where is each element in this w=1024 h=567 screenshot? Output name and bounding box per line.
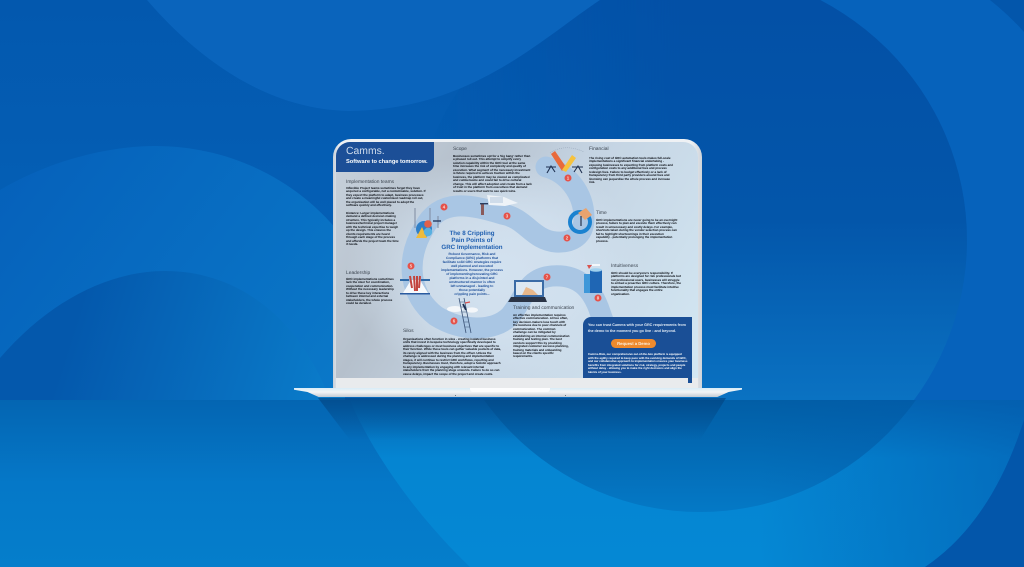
step number markers: 4 bbox=[443, 205, 446, 210]
heading: Leadership bbox=[346, 271, 370, 276]
intro text: those potentially bbox=[459, 288, 485, 292]
body text: The rising cost of GRC automation tools makes full-scale implementations a significant financial undertaking - exposing businesses to expecting from platform costs and configuration costs to any additional fees and process redesign fees. Failure to budget effectively or a lack of transparency from third party providers around fees and licensing can jeopardise the whole process and increase risk. bbox=[589, 156, 673, 184]
title: Pain Points of bbox=[451, 237, 493, 244]
title bbox=[441, 230, 503, 251]
journey path bbox=[412, 167, 616, 352]
body text: Businesses sometimes opt for a 'big bang' rather than a phased roll out. This attempt to simplify every solution capability within the GRC tool at the same time increases the risk of complexity and quality of execution. What segment of the necessary investment is future required to achieve traction within the business, the platform may be viewed as complicated and cumbersome and could fail to drive cultural change. This will affect adoption and create from a lack of trust in the platform from executives that demand results or users that want to see quick wins. bbox=[453, 154, 532, 193]
step number markers: 1 bbox=[567, 176, 570, 181]
intro text: Compliance (GRC) platforms that bbox=[446, 256, 498, 260]
section: financial bbox=[589, 146, 673, 184]
CTA headline: You can trust Camms with your GRC requirements from bbox=[588, 323, 686, 327]
logo: Camms. bbox=[346, 146, 385, 157]
body text: GRC implementations are never going to be an overnight process, failure to plan and execute them effectively can result in unnecessary and costly delays. For example, shortcuts taken during the vendor selection process can fail to highlight shortcomings in their execution capability - potentially prolonging the implementation process. bbox=[596, 218, 677, 243]
intro text: implementations. However, the process bbox=[441, 268, 503, 272]
icon: scope plans and figure bbox=[480, 195, 518, 215]
header: Camms branding bbox=[336, 142, 434, 172]
intro text: crippling pain points... bbox=[454, 292, 490, 296]
step number markers: 8 bbox=[597, 296, 600, 301]
CTA body text: Camms.Risk, our comprehensive out-of-the-box platform is equipped with the agility required to keep pace with the evolving demands of GRC, and our collaborative approach to implementation ensures your business benefits from integrated solutions for risk, strategy, projects and people without delay - allowing you to make the right decisions and align the talents of your business. bbox=[588, 352, 687, 374]
step number markers bbox=[408, 174, 602, 324]
title: GRC Implementation bbox=[441, 244, 503, 251]
intro text: facilitate solid GRC strategies require bbox=[443, 260, 501, 264]
section: implementation teams bbox=[346, 180, 426, 246]
intro text: of implementing/renovating GRC bbox=[446, 272, 498, 276]
paragraph two: Distance: Larger implementations demand a defined decision making structure. This typically includes a business/technical project manager with the technical expertise to weigh up the design. This ensures the clients requirements are heard through each stage of the process and affords the project team the time it needs. bbox=[346, 211, 399, 246]
icon: implementation team figures bbox=[415, 208, 441, 238]
icon: time circular clock bbox=[570, 208, 592, 232]
body text: An effective implementation requires effective communication. All too often, key decision-makers lose touch with the business due to poor channels of communication. The common challenge can be mitigated by establishing an internal communication training and testing plan. The best vendors support this by providing integrated customer success planning, training materials and onboarding based on the clients specific requirements. bbox=[513, 313, 570, 358]
section: leadership bbox=[346, 270, 394, 305]
intro text: left unmanaged - leading to bbox=[451, 284, 493, 288]
icon: financial arrows and figures bbox=[546, 148, 584, 173]
centre title and intro bbox=[441, 230, 503, 296]
paragraph one: Inflexible Project teams sometimes forget they have acquired a configurable, not a customisable, solution. If they expect the platform to adapt, business processes and create a meaningful customised roadmap roll out, the organisation will be well placed to adopt the software quickly and effectively. bbox=[346, 186, 426, 207]
step number markers: 6 bbox=[453, 319, 456, 324]
small blue tab below CTA bbox=[688, 378, 692, 383]
section: training and communication bbox=[513, 306, 574, 358]
step number markers: 3 bbox=[506, 214, 509, 219]
title: The 8 Crippling bbox=[449, 230, 495, 236]
section: scope bbox=[453, 146, 532, 193]
intro text: platforms in a disjointed and bbox=[450, 276, 494, 280]
infographic page background bbox=[336, 142, 698, 378]
call to action panel bbox=[583, 317, 692, 378]
laptop lid frame bbox=[333, 139, 702, 389]
intro text: well planned and executed bbox=[451, 264, 493, 268]
heading: Intuitiveness bbox=[611, 264, 638, 269]
intro text: Robust Governance, Risk and bbox=[449, 252, 495, 256]
icon: silos ladder and clouds bbox=[447, 298, 478, 333]
hinge dots bbox=[455, 394, 566, 396]
heading: Financial bbox=[589, 147, 609, 152]
icon: leadership group on platform bbox=[400, 276, 430, 294]
tagline: Software to change tomorrow. bbox=[346, 159, 428, 165]
section: intuitiveness bbox=[611, 264, 681, 296]
heading: Implementation teams bbox=[346, 180, 394, 185]
body text: GRC should be everyone's responsibility. If platforms are designed for risk professionals but not professional users, businesses will struggle to embed a proactive GRC culture. Therefore, the implementation process must facilitate intuitive functionality that engages the entire organisation. bbox=[611, 271, 681, 296]
laptop bbox=[294, 139, 742, 397]
step number markers: 7 bbox=[546, 275, 549, 280]
heading: Silos bbox=[403, 329, 414, 334]
body text: GRC implementations sometimes lack the steer for coordination, cooperation and communication. Without the necessary leadership to drive these key interactions between internal and external stakeholders, the whole process could be derailed. bbox=[346, 277, 394, 305]
icon: intuitiveness book cylinder bbox=[584, 264, 602, 293]
step number markers: 5 bbox=[410, 264, 413, 269]
heading: Training and communication bbox=[513, 306, 574, 311]
CTA headline bbox=[588, 323, 686, 333]
laptop screen: infographic bbox=[336, 142, 698, 388]
section: silos bbox=[403, 328, 501, 376]
CTA headline: the demo to the moment you go live - and beyond. bbox=[588, 329, 676, 333]
intro text bbox=[441, 252, 503, 296]
intro text: unstructured manner is often bbox=[449, 280, 495, 284]
step number markers: 2 bbox=[566, 236, 569, 241]
heading: Scope bbox=[453, 147, 467, 152]
icon: training laptop bbox=[508, 280, 547, 302]
request a demo button: Request a Demo bbox=[617, 341, 650, 346]
laptop notch bbox=[470, 388, 550, 392]
section: time bbox=[596, 210, 678, 243]
heading: Time bbox=[596, 211, 607, 216]
body text: Organisations often function in silos - creating isolated business units that invest in bespoke technology specifically developed to address challenges or meet business objectives that are specific to their function. While these tools can gather valuable pockets of data, its rarely aligned with the business from the offset. Unless the challenge is addressed during the planning and implementation stages, it will continue to restrict GRC workflows, reporting and transparency. Businesses must, therefore, adopt a holistic approach to any implementation by engaging with relevant internal stakeholders from the planning stage onwards. Failure to do so can cause delays, impact the scope of the project and create costs. bbox=[403, 337, 501, 376]
request a demo button bbox=[611, 339, 656, 348]
laptop base bbox=[294, 388, 742, 397]
